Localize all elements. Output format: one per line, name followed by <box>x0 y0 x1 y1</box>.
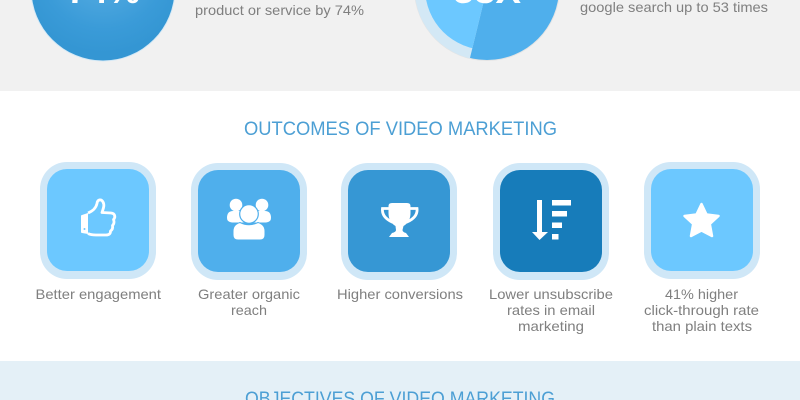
label: higher click-through <box>644 286 759 334</box>
label: higher click-through: 41% higher <box>665 286 738 302</box>
heading: outcomes: OUTCOMES OF VIDEO MARKETING <box>244 119 557 140</box>
label: lower unsubscribe rates: marketing <box>518 318 584 334</box>
icon: trophy <box>382 203 417 237</box>
icon: people group <box>227 199 271 240</box>
label: greater organic reach <box>198 286 300 318</box>
icon: descending sort <box>532 200 571 240</box>
icon: thumbs up <box>81 200 115 235</box>
stat circle: 74% <box>30 0 176 62</box>
label: greater organic reach: Greater organic <box>198 286 300 302</box>
label: lower unsubscribe rates <box>489 286 613 334</box>
tile: greater organic reach <box>191 163 307 280</box>
stat text: purchase: product or service by 74% <box>195 2 364 18</box>
label: better engagement: Better engagement <box>36 286 161 302</box>
panel: statistics band <box>0 0 800 91</box>
tile: higher click-through <box>644 162 760 279</box>
stat pie: 53X <box>414 0 560 61</box>
tile: higher conversions <box>341 163 457 280</box>
label: lower unsubscribe rates: rates in email <box>507 302 595 318</box>
label: higher click-through: than plain texts <box>652 318 752 334</box>
tile: better engagement <box>40 162 156 279</box>
label: higher click-through: click-through rate <box>644 302 759 318</box>
icon: star <box>684 204 718 236</box>
panel: objectives band <box>0 361 800 400</box>
label: lower unsubscribe rates: Lower unsubscribe <box>489 286 613 302</box>
tile: lower unsubscribe rates <box>493 163 609 280</box>
label: higher conversions: Higher conversions <box>337 286 463 302</box>
label: greater organic reach: reach <box>231 302 267 318</box>
